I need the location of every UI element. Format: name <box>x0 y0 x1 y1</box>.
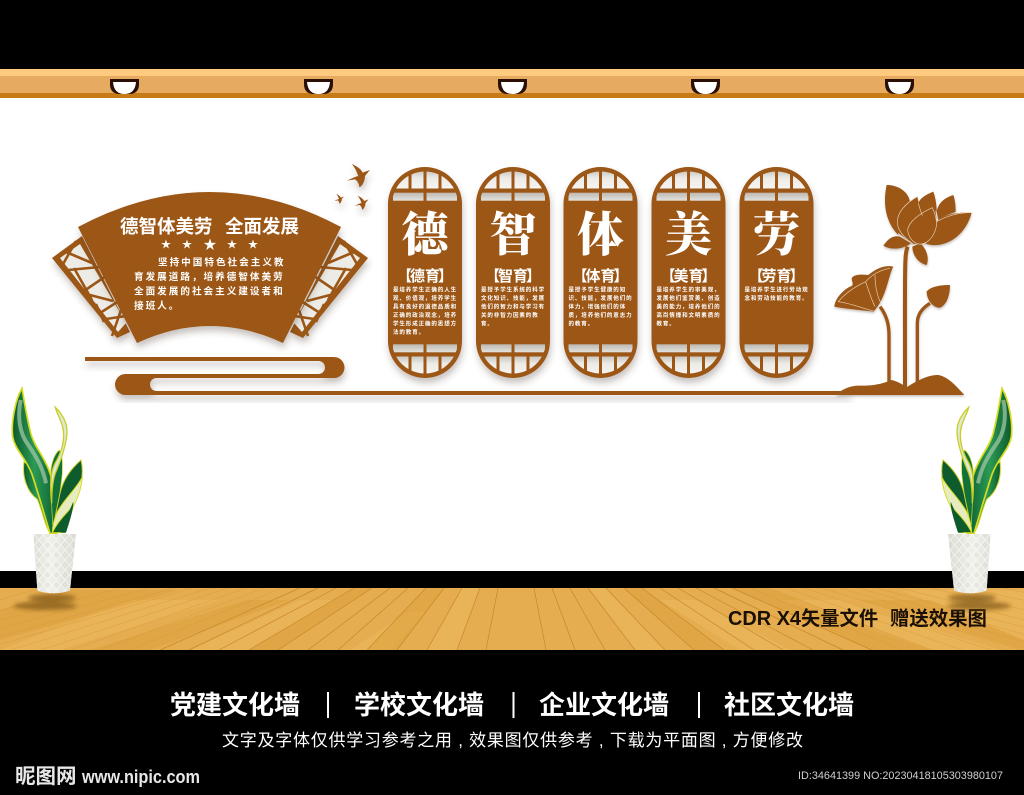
black footer band <box>0 650 1024 795</box>
fan centre shape <box>78 192 341 343</box>
fan stars: ★ <box>182 240 192 251</box>
fan stars: ★ <box>203 237 217 252</box>
scroll bars and base line <box>85 357 850 395</box>
fan right lattice wing <box>290 236 368 338</box>
watermark logo <box>15 765 200 788</box>
panel: 美: 美 <box>665 198 712 265</box>
footer headline: 社区文化墙 <box>724 690 854 720</box>
caption on floor: CDR X4 <box>728 608 802 630</box>
panel: 体 <box>564 167 638 378</box>
wooden floor <box>0 588 1024 650</box>
fan title: 全面发展 <box>225 216 299 237</box>
watermark logo: 昵图网 <box>15 765 76 788</box>
fan stars: ★ <box>227 240 237 251</box>
panel: 劳: 劳 <box>753 198 800 265</box>
panel: 体: 是授予学生健康的知 <box>568 286 626 294</box>
plant right shadow <box>947 594 1011 610</box>
panel: 体: 体 <box>577 198 624 265</box>
fan body text: 接班人。 <box>134 300 180 312</box>
panel: 智 <box>476 167 550 378</box>
panel: 智: 是授予学生系统的科学 <box>481 286 545 294</box>
plant left shadow <box>13 594 77 610</box>
panel: 智: 文化知识、技能，发展 <box>481 294 545 302</box>
panel: 劳 <box>740 167 814 378</box>
fan body text <box>134 256 286 312</box>
panel: 美 <box>652 167 726 378</box>
icon: lotus <box>834 185 972 395</box>
ceiling band with lights <box>0 69 1024 98</box>
plant right <box>942 388 1012 593</box>
caption on floor: 矢量文件 <box>801 607 878 630</box>
footer headline <box>170 690 854 720</box>
fan left lattice wing <box>52 236 130 338</box>
panel: 智: 【智育】 <box>485 267 541 285</box>
panel: 德: 具有良好的道德品质和 <box>393 302 457 310</box>
panel: 智: 他们的智力和与学习有 <box>481 302 545 310</box>
black top band <box>0 0 1024 69</box>
panel: 德: 学生形成正确的思想方 <box>393 320 457 328</box>
caption on floor: 赠送效果图 <box>890 608 987 630</box>
caption on floor <box>728 607 987 630</box>
panel: 德: 是培养学生正确的人生 <box>393 286 457 294</box>
fan body text: 坚持中国特色社会主义教 <box>158 256 286 268</box>
panel: 美: 教育。 <box>656 320 676 328</box>
panel: 智: 智 <box>490 198 536 265</box>
plant left <box>12 388 82 593</box>
panel: 德: 观、价值观，培养学生 <box>393 294 457 302</box>
image id: ID:34641399 NO:20230418105303980107 <box>798 770 1003 782</box>
panel: 体: 质，培养他们的意志力 <box>568 311 633 319</box>
panel: 体: 识、技能，发展他们的 <box>568 294 633 302</box>
panel: 美: 美的能力，培养他们的 <box>656 302 721 310</box>
panel: 智: 关的非智力因素的教 <box>481 311 539 319</box>
fan body text: 育发展道路，培养德智体美劳 <box>134 271 285 283</box>
fan stars: ★ <box>161 240 171 251</box>
panel: 美: 是培养学生的审美观， <box>656 286 721 294</box>
panel: 体: 【体育】 <box>572 267 629 285</box>
panel: 美: 发展他们鉴赏美、创造 <box>656 294 721 302</box>
panel: 美: 【美育】 <box>660 267 717 285</box>
panel: 体: 体力，增强他们的体 <box>568 302 626 310</box>
fan stars: ★ <box>248 240 258 251</box>
fan stars <box>161 237 258 252</box>
fan panel <box>52 192 368 343</box>
panel: 德: 法的教育。 <box>393 328 425 336</box>
panel: 智: 育。 <box>481 320 494 328</box>
panel: 德: 正确的政治观念，培养 <box>393 311 457 319</box>
watermark logo: www.nipic.com <box>81 767 200 787</box>
icon: swallows <box>334 164 370 210</box>
panel: 体: 的教育。 <box>568 320 594 328</box>
footer headline: 企业文化墙 <box>539 690 669 720</box>
panel: 德 <box>388 167 462 378</box>
footer headline: 学校文化墙 <box>354 690 484 720</box>
fan body text: 全面发展的社会主义建设者和 <box>134 286 285 298</box>
footer note: 文字及字体仅供学习参考之用 , 效果图仅供参考 , 下载为平面图 , 方便修改 <box>222 731 803 750</box>
panel: 劳: 念和劳动技能的教育。 <box>744 294 809 302</box>
footer headline: 党建文化墙 <box>170 690 300 720</box>
fan title: 德智体美劳 <box>120 216 213 237</box>
panel: 德: 【德育】 <box>397 267 453 285</box>
panel: 德: 德 <box>402 198 452 265</box>
panel: 美: 高尚情操和文明素质的 <box>656 311 721 319</box>
baseboard <box>0 571 1024 588</box>
white wall <box>0 98 1024 571</box>
panel: 劳: 【劳育】 <box>748 267 805 285</box>
panel: 劳: 是培养学生进行劳动观 <box>744 286 809 294</box>
